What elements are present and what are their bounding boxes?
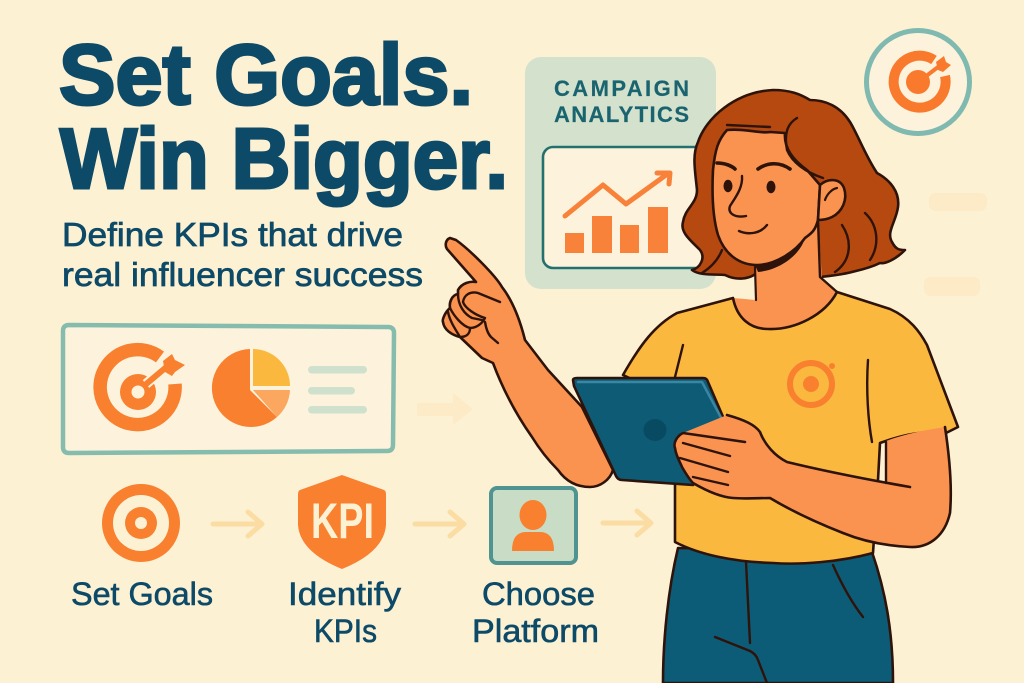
arrow: step two to three — [415, 512, 464, 536]
pants creases — [715, 562, 863, 683]
arrow: step one to two — [213, 512, 262, 536]
subtitle — [62, 216, 423, 293]
subtitle: real influencer success — [62, 256, 423, 293]
label — [288, 576, 401, 649]
pie chart — [212, 349, 290, 427]
legend lines — [308, 366, 367, 414]
icon: top right target badge — [866, 30, 970, 134]
chart card — [543, 147, 713, 268]
left arm and pointing hand — [443, 238, 613, 487]
neck — [733, 215, 837, 329]
panel heading: ANALYTICS — [554, 102, 689, 127]
panel heading — [554, 76, 689, 127]
label: Identify — [288, 576, 401, 612]
title — [59, 28, 508, 207]
icon: target with arrow — [100, 350, 185, 425]
trend arrow — [565, 173, 670, 216]
shirt creases — [675, 345, 872, 442]
panel background — [525, 57, 716, 289]
face — [713, 130, 820, 265]
icon: KPI shield — [298, 475, 386, 569]
icon: KPI shield: KPI — [311, 493, 374, 549]
panel heading: CAMPAIGN — [554, 76, 689, 101]
subtitle: Define KPIs that drive — [62, 216, 403, 253]
face details — [702, 118, 876, 300]
label: Set Goals — [71, 576, 213, 612]
title: Win Bigger. — [60, 112, 508, 207]
arrow: step three onward — [603, 511, 651, 535]
process step: choose platform — [472, 488, 599, 649]
title: Set Goals. — [59, 28, 473, 123]
panel frame — [63, 325, 394, 453]
icon: bullseye — [102, 484, 180, 562]
t-shirt — [623, 292, 958, 564]
panel: campaign analytics — [525, 57, 716, 289]
arrow: faint panel arrow — [417, 393, 473, 425]
pants — [663, 548, 893, 683]
label: Platform — [472, 613, 599, 649]
ear — [818, 180, 845, 220]
decorative faint bars — [924, 193, 987, 296]
chin shadow — [755, 238, 805, 272]
process step: set goals — [71, 484, 213, 612]
process step: identify KPIs — [288, 475, 401, 649]
eyes — [724, 180, 776, 193]
right arm and hand — [674, 415, 951, 547]
tablet — [573, 378, 733, 485]
label — [472, 576, 599, 649]
hair — [682, 90, 905, 279]
bar chart — [565, 207, 668, 253]
panel: goals overview — [63, 325, 394, 453]
icon: profile card — [491, 488, 576, 563]
label: Choose — [482, 576, 595, 612]
logo: shirt target — [790, 363, 835, 405]
label: KPIs — [314, 613, 377, 649]
illustration: woman with tablet — [443, 90, 958, 683]
